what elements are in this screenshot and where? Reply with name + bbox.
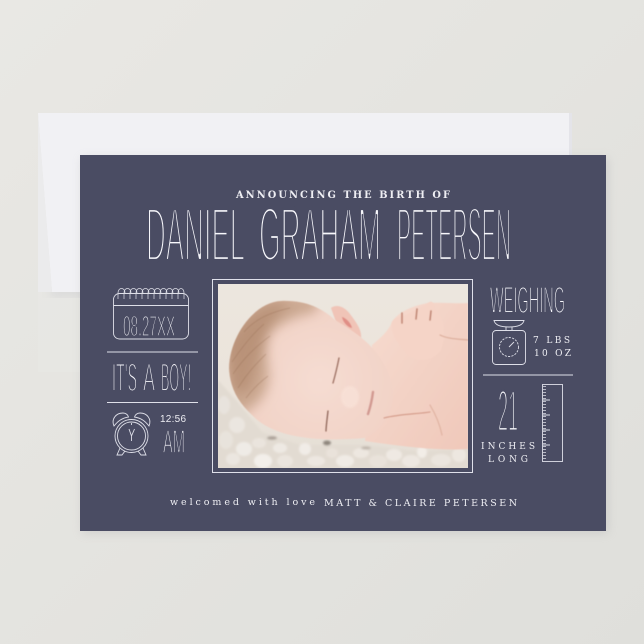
announcement card: BOY! [161, 356, 191, 400]
panel: time [113, 413, 186, 460]
baby nose [343, 388, 358, 406]
panel: length [481, 379, 562, 465]
baby body [365, 303, 468, 450]
announcement card: AM [163, 423, 185, 460]
card shadow [82, 158, 608, 533]
baby hair [229, 300, 321, 414]
envelope [38, 113, 572, 372]
baby name heading: GRAHAM [259, 192, 381, 278]
weight value: 7 LBS [533, 336, 570, 346]
gender note: IT'S [112, 356, 137, 400]
weight value: 10 OZ [534, 349, 571, 359]
length unit [481, 442, 535, 465]
baby head [228, 300, 372, 440]
baby hand [428, 302, 432, 304]
panel: length: 21 [498, 379, 518, 444]
blanket texture [218, 380, 468, 468]
baby photo [218, 284, 468, 468]
baby name heading: DANIEL [146, 192, 245, 278]
icon: baby scale [492, 320, 526, 364]
length unit: INCHES [481, 442, 535, 452]
closing line [170, 497, 517, 509]
intro line: ANNOUNCING THE BIRTH OF [235, 190, 450, 201]
panel: date [114, 288, 188, 343]
birth time: 12:56 [160, 414, 186, 425]
photo frame [212, 280, 472, 472]
baby facial details [326, 309, 468, 435]
panel: weight [490, 280, 571, 364]
closing line: MATT & CLAIRE PETERSEN [324, 498, 517, 509]
baby ear [331, 306, 361, 338]
weight value [533, 336, 571, 359]
announcement card [80, 155, 606, 531]
gender note: A [143, 356, 155, 400]
divider [107, 352, 573, 402]
icon: alarm clock [113, 413, 150, 455]
icon: ruler [542, 384, 562, 462]
icon: calendar [114, 288, 188, 339]
panel: date: 08.27XX [123, 311, 175, 343]
length unit: LONG [488, 455, 528, 465]
closing line: welcomed with love [170, 497, 315, 508]
